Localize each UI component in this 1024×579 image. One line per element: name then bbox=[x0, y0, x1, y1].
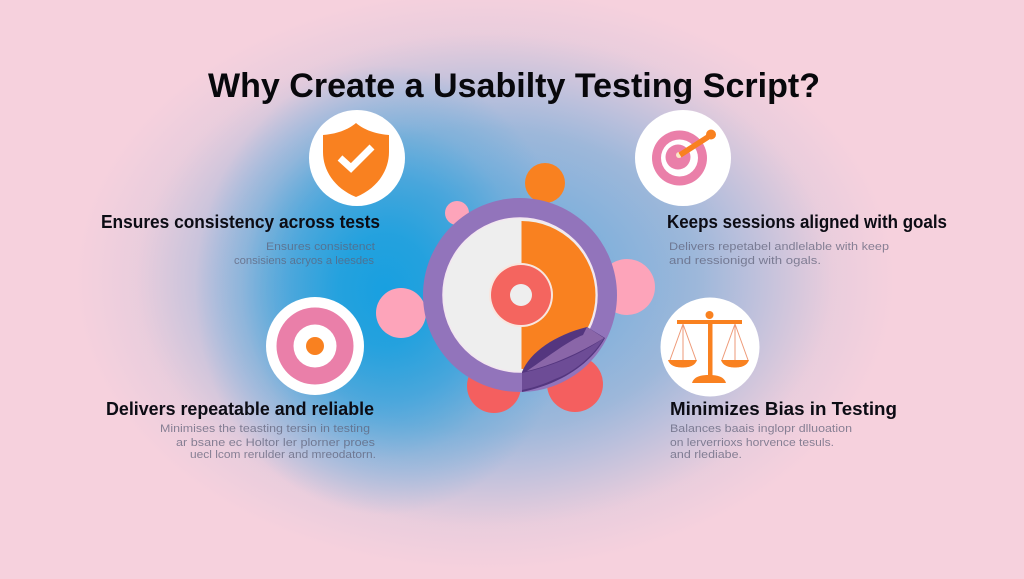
item: Minimizes Bias in Testing bbox=[660, 298, 897, 461]
satellite: lower left red circle bbox=[467, 359, 521, 413]
icon: shield with check bbox=[309, 110, 405, 206]
description: Ensures consistenct bbox=[266, 241, 375, 253]
heading: Keeps sessions aligned with goals bbox=[667, 211, 947, 232]
icon: target bbox=[266, 297, 364, 395]
satellite: right pink circle bbox=[599, 259, 655, 315]
description bbox=[234, 241, 375, 267]
heading: Ensures consistency across tests bbox=[101, 211, 380, 232]
item: Keeps sessions aligned with goals bbox=[635, 110, 947, 267]
peeled corner bbox=[522, 327, 605, 392]
icon: balance scale bbox=[660, 298, 760, 396]
heading: Minimizes Bias in Testing bbox=[670, 398, 897, 419]
target red ring bbox=[491, 265, 551, 325]
peel base bbox=[522, 327, 605, 392]
description: Balances baais inglopr dlluoation bbox=[670, 423, 852, 435]
satellite: lower right red circle bbox=[547, 356, 603, 412]
description: Minimises the teasting tersin in testing bbox=[160, 423, 370, 435]
description: and rlediabe. bbox=[670, 449, 742, 461]
orange half of disc bbox=[522, 221, 595, 369]
description: ar bsane ec Holtor ler plorner proes bbox=[176, 437, 376, 449]
item: Delivers repeatable and reliable bbox=[106, 297, 376, 461]
target ring in disc bbox=[489, 263, 553, 327]
purple outer ring bbox=[423, 198, 617, 392]
description: and ressionigd with ogals. bbox=[669, 255, 821, 267]
target center bbox=[510, 284, 532, 306]
central diagram bbox=[376, 163, 655, 413]
satellite: left pink circle bbox=[376, 288, 426, 338]
title: Why Create a Usabilty Testing Script? bbox=[208, 67, 820, 105]
description bbox=[670, 423, 852, 461]
description bbox=[160, 423, 376, 461]
peel light face bbox=[527, 327, 604, 371]
heading: Delivers repeatable and reliable bbox=[106, 398, 374, 419]
description bbox=[669, 241, 889, 267]
description: consisiens acryos a leesdes bbox=[234, 255, 374, 267]
satellite: small pink circle bbox=[445, 201, 469, 225]
description: on lerverrioxs horvence tesuls. bbox=[670, 437, 834, 449]
satellite: orange top circle bbox=[525, 163, 565, 203]
icon: dart target bbox=[635, 110, 731, 206]
description: uecl lcom rerulder and mreodatorn. bbox=[190, 449, 376, 461]
peel lower band bbox=[522, 338, 604, 390]
item: Ensures consistency across tests bbox=[101, 110, 405, 267]
inner light disc bbox=[443, 218, 597, 372]
description: Delivers repetabel andlelable with keep bbox=[669, 241, 889, 253]
